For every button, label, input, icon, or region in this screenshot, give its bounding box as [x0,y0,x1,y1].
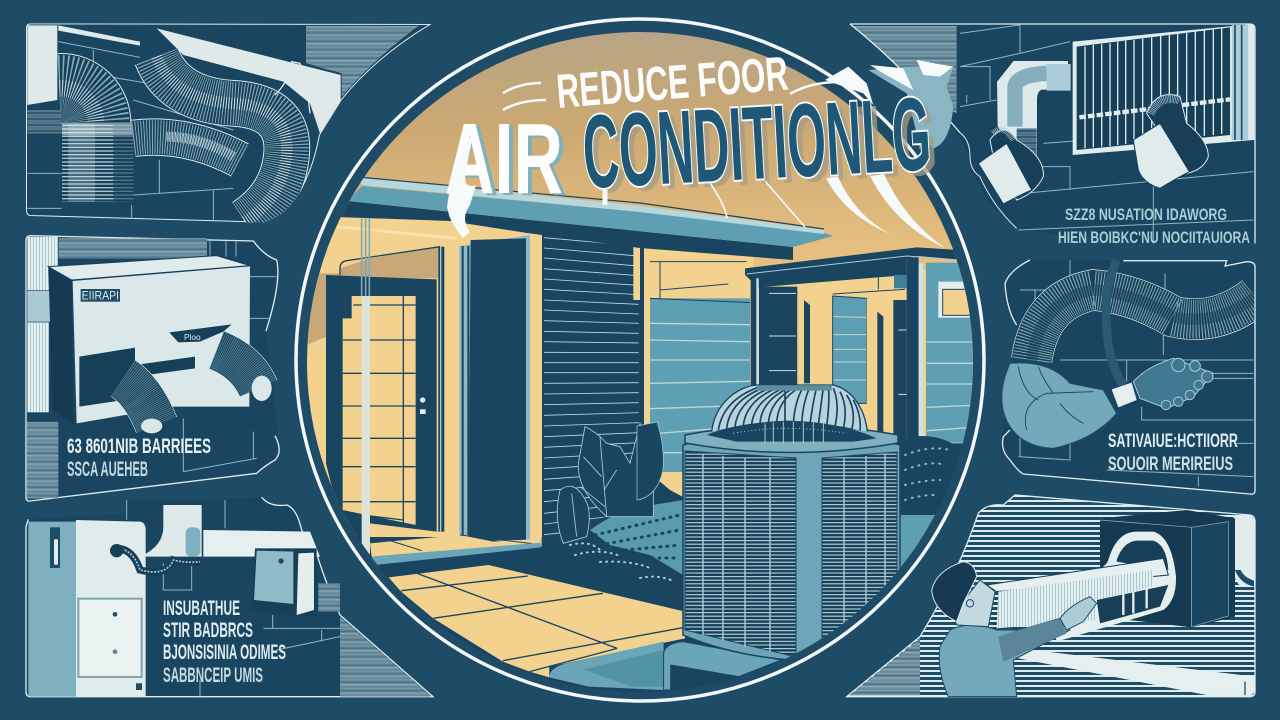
main roof [337,177,833,260]
pale door post [362,218,370,554]
annex roof [745,247,963,287]
outdoor AC unit [683,385,900,660]
broad leaves [557,423,653,543]
cloth ribbon, top right of title [825,60,953,148]
large corrugated hose [157,57,310,222]
main illustration: house and outdoor AC unit [300,25,980,705]
house annex and teal walls, right [633,243,979,475]
dark duct box [1100,510,1235,627]
cabinet [28,520,146,697]
panel: cabinet and duct, bottom left [26,497,433,697]
glove [1133,358,1213,410]
panel: wall unit with two ducts, middle left [26,236,280,501]
annex pillar [759,287,810,390]
sleeve [1002,363,1117,448]
left duct [123,378,162,433]
panel: corrugated hose and gloved arm, middle right [1000,260,1255,494]
right coil grille [822,452,897,640]
panel: technician replacing filter, bottom right [847,495,1255,697]
house entrance, left [307,218,642,565]
text: insulation label: INSUBATHUE [163,597,240,620]
title [445,48,940,217]
patio paving [389,565,781,690]
filter opening [1050,532,1176,642]
fan cage [707,385,877,444]
circle ring [296,19,984,701]
left sealed duct wrap [978,130,1043,204]
technician [932,562,1097,697]
wall unit box: Ploo [184,332,201,342]
air filter being lifted [987,558,1168,628]
left coil grille [685,451,796,657]
horizontal duct [140,505,320,557]
text: insulation label: SABBNCEIP UMIS [163,664,263,687]
title line one: REDUCE FOOR [555,48,790,119]
elbow pipe [997,61,1071,157]
sky [326,32,954,250]
concrete pad [549,642,781,690]
duct elbow [59,88,96,124]
cylinder duct section [62,123,133,202]
title word AIR shadow: AIR [449,105,567,217]
corrugated hose [1032,290,1255,360]
panel: vent grille and sealed ducts, top right [850,24,1255,243]
panel: flexible ducts, top left [26,23,432,223]
middle duct [133,137,240,160]
door handle [420,397,426,414]
siding wall [542,233,642,547]
text: barrier label: SSCA AUEHEB [67,458,148,481]
wall unit box: EIIRAPI [82,289,119,303]
text: sealant label [1108,431,1238,475]
text: insulation label, top right: SZZ8 NUSATION IDAWORG [1065,205,1227,224]
text: barrier label: 63 8601NIB BARRIEES [67,435,211,458]
title word AIR: AIR [445,103,563,215]
vent grille [1073,24,1254,155]
airflow swooshes [447,82,945,248]
right duct [217,350,272,401]
teal wall with window [926,262,973,443]
text: insulation label: STIR BADBRCS [163,619,253,642]
wall unit box [48,256,250,424]
text: insulation label: BJONSISINIA ODIMES [163,641,286,664]
wall control box [252,548,317,617]
text: insulation label, top right [1058,205,1250,247]
tall dark door [459,235,530,545]
text: insulation label [163,597,286,687]
cable connector [110,544,200,572]
annex recess [833,296,907,440]
left stub duct [27,110,62,134]
text: barrier label [67,435,211,481]
glazed side window [343,296,416,525]
floor sill [370,535,541,565]
hanging strap [1106,260,1123,385]
cuff [1112,383,1137,407]
shrubs and ground [557,422,960,590]
right sealed duct wrap [1133,95,1208,188]
dark leaf beside unit [637,422,663,500]
unit body [683,430,900,660]
